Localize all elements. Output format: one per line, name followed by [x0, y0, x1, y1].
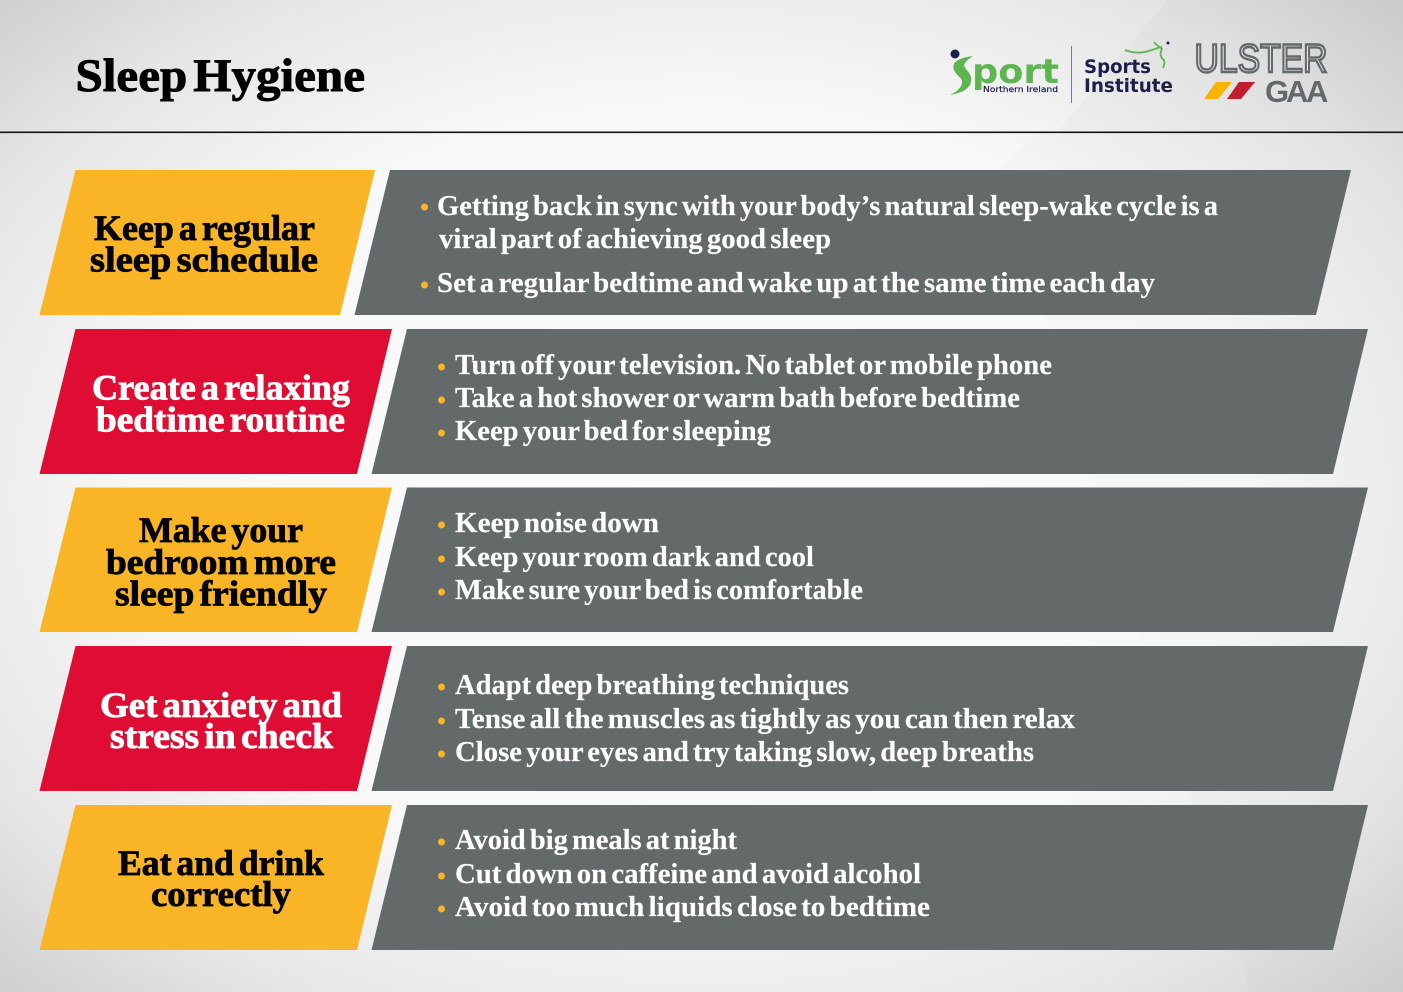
panel: row 5 content: Avoid big meals at night [455, 825, 737, 856]
logo: Sport Northern Ireland: Northern Ireland [983, 85, 1058, 94]
panel: row 5 content: Cut down on caffeine and avoid alcohol [455, 859, 921, 890]
panel: row 2 content [372, 329, 1368, 474]
panel: row 1 label: Keep a regular [94, 208, 315, 248]
title: Sleep Hygiene [76, 50, 365, 102]
panel: row 2 label: bedtime routine [96, 400, 345, 440]
logo: Ulster GAA: GAA [1265, 74, 1328, 109]
panel: row 1 label: sleep schedule [90, 240, 318, 280]
panel: row 5 label: Eat and drink [118, 843, 324, 883]
logo: Ulster GAA: ULSTER [1194, 37, 1328, 81]
panel: row 3 label: bedroom more [106, 542, 336, 582]
logo: Ulster GAA [1194, 37, 1328, 109]
logo: Sports Institute: Institute [1084, 75, 1173, 97]
panel: row 1 content [354, 170, 1351, 315]
panel: row 5 content: Avoid too much liquids close to bedtime [455, 892, 930, 923]
panel: row 4 label [40, 646, 392, 791]
panel: row 3 content: Keep your room dark and cool [455, 542, 814, 573]
panel: row 4 content: Close your eyes and try taking slow, deep breaths [455, 737, 1034, 768]
panel: row 3 content: Make sure your bed is comfortable [455, 575, 863, 606]
header rule [0, 132, 1403, 133]
panel: row 1 content: viral part of achieving good sleep [439, 224, 831, 255]
panel: row 2 label [40, 329, 392, 474]
panel: row 5 content [372, 805, 1368, 950]
panel: row 5 label [40, 805, 392, 950]
panel: row 5 label: correctly [151, 874, 291, 914]
panel: row 4 content [372, 646, 1368, 791]
panel: row 4 content: Tense all the muscles as tightly as you can then relax [455, 704, 1076, 735]
logo: Sport Northern Ireland: port [972, 52, 1059, 92]
panel: row 4 content: Adapt deep breathing techniques [455, 670, 849, 701]
panel: row 3 label: Make your [139, 510, 303, 550]
panel: row 3 content: Keep noise down [455, 508, 659, 539]
panel: row 1 content: Set a regular bedtime and wake up at the same time each day [437, 268, 1155, 299]
panel: row 4 label: stress in check [110, 716, 333, 756]
panel: row 3 label: sleep friendly [115, 574, 327, 614]
panel: row 4 label: Get anxiety and [100, 685, 342, 725]
logo: Sport Northern Ireland [950, 50, 1059, 95]
panel: row 2 label: Create a relaxing [92, 368, 350, 408]
panel: row 1 label [40, 170, 375, 315]
panel: row 3 label [40, 488, 392, 632]
logo: Sports Institute [1084, 42, 1173, 97]
panel: row 3 content [372, 488, 1368, 632]
panel: row 2 content: Turn off your television. No tablet or mobile phone [455, 350, 1052, 381]
panel: row 2 content: Take a hot shower or warm bath before bedtime [455, 383, 1020, 414]
logo: Sports Institute: Sports [1084, 56, 1151, 78]
logo divider [1071, 46, 1072, 103]
panel: row 1 content: Getting back in sync with your body’s natural sleep-wake cycle is a [437, 191, 1218, 222]
panel: row 2 content: Keep your bed for sleeping [455, 416, 771, 447]
